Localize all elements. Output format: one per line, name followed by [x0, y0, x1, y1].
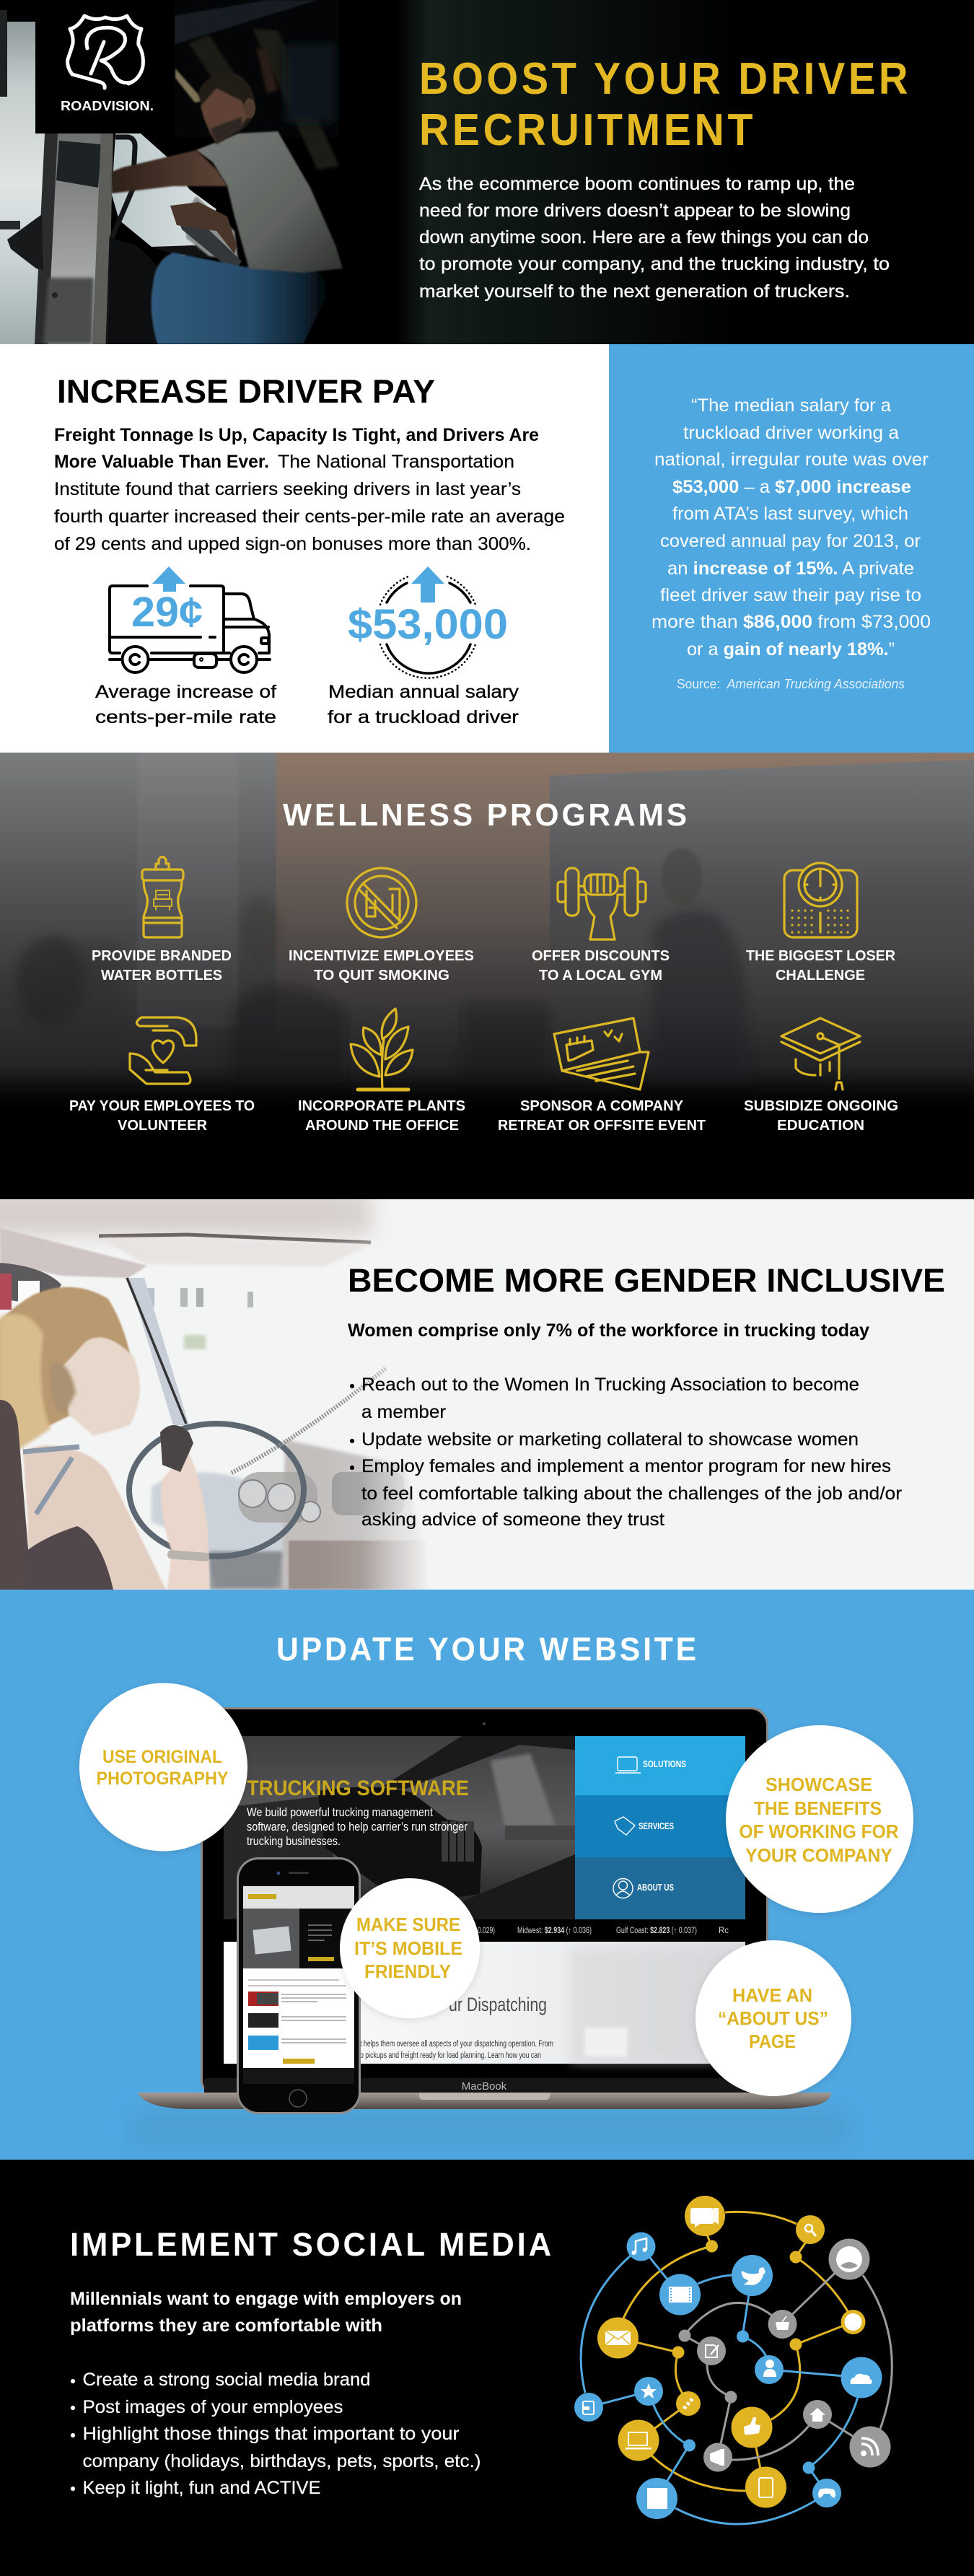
laptop screen hero	[224, 1736, 745, 1919]
laptop nav tiles: SOLUTIONS	[643, 1759, 686, 1769]
network diagram: social icons	[574, 2196, 892, 2524]
laptop price ticker: Midwest: $2.934 (↑ 0.036)	[517, 1927, 592, 1935]
callout: use original photography: PHOTOGRAPHY	[97, 1769, 229, 1789]
laptop price ticker: 0.029)	[478, 1927, 495, 1935]
icon: plant	[351, 1009, 413, 1090]
list: gender tips: asking advice of someone they trust	[361, 1510, 664, 1530]
callout: showcase benefits: THE BENEFITS	[754, 1797, 882, 1819]
text block: pay paragraph: fourth quarter increased their cents-per-mile rate an average	[54, 507, 565, 527]
list: gender tips: to feel comfortable talking about the challenges of the job and/or	[361, 1484, 902, 1504]
subheading: millennials: Millennials want to engage with employers on	[70, 2289, 462, 2309]
panel: quote: more than $86,000 from $73,000	[651, 612, 931, 632]
callout: mobile friendly	[340, 1878, 480, 2018]
callout: mobile friendly: IT’S MOBILE	[354, 1937, 462, 1959]
panel: quote: national, irregular route was over	[654, 450, 929, 470]
panel: quote: truckload driver working a	[683, 423, 899, 443]
list: gender tips: Update website or marketing collateral to showcase women	[361, 1429, 859, 1450]
label: education	[744, 1098, 898, 1134]
panel: header	[0, 0, 974, 344]
panel: wellness programs	[0, 753, 974, 1199]
subheading: women 7 percent: Women comprise only 7% of the workforce in trucking today	[348, 1320, 869, 1341]
logo	[35, 0, 175, 133]
laptop hero text: We build powerful trucking management	[247, 1805, 433, 1819]
heading: update your website: UPDATE YOUR WEBSITE	[276, 1631, 699, 1668]
label: volunteer: VOLUNTEER	[118, 1118, 208, 1134]
laptop lower section: ur Dispatching	[449, 1994, 547, 2015]
label: plants: INCORPORATE PLANTS	[298, 1098, 465, 1114]
list: gender tips: a member	[361, 1402, 446, 1422]
title: BOOST YOUR DRIVER	[419, 54, 911, 104]
text block: pay paragraph: Institute found that carriers seeking drivers in last year’s	[54, 479, 521, 499]
list: social tips	[71, 2370, 481, 2498]
stat caption: median salary: Median annual salary	[328, 682, 519, 702]
icon: delivery truck with 29 cents	[110, 566, 270, 673]
heading: implement social media: IMPLEMENT SOCIAL MEDIA	[70, 2226, 554, 2263]
heading: gender inclusive: BECOME MORE GENDER INCLUSIVE	[348, 1262, 945, 1299]
photo: woman driver in cab	[0, 1191, 505, 1590]
list: social tips: Keep it light, fun and ACTIVE	[82, 2478, 320, 2498]
laptop mockup: MacBook	[462, 2080, 507, 2093]
panel: quote: from ATA’s last survey, which	[672, 504, 908, 524]
list: gender tips	[350, 1375, 902, 1530]
panel: quote: $53,000 – a $7,000 increase	[672, 477, 911, 497]
laptop mockup	[138, 1707, 831, 2109]
icon: salary dial with 53,000: $53,000	[348, 601, 508, 648]
logo: ROADVISION.	[61, 99, 154, 113]
label: biggest loser: THE BIGGEST LOSER	[746, 948, 896, 964]
text block: intro: to promote your company, and the trucking industry, to	[419, 254, 890, 274]
label: biggest loser: CHALLENGE	[776, 968, 865, 983]
heading: wellness programs: WELLNESS PROGRAMS	[283, 797, 690, 833]
list: social tips: Highlight those things that important to your	[82, 2424, 459, 2444]
photo: office background	[16, 753, 974, 1082]
text block: intro: need for more drivers doesn’t appear to be slowing	[419, 201, 851, 221]
icon: weight scale	[784, 863, 857, 937]
text block: intro: As the ecommerce boom continues to ramp up, the	[419, 174, 855, 194]
label: incentivize employees: INCENTIVIZE EMPLOYEES	[289, 948, 474, 964]
icon: salary dial with 53,000	[348, 566, 508, 678]
stat caption: median salary	[328, 682, 519, 727]
callout: showcase benefits	[726, 1725, 913, 1913]
icon: shield with R	[68, 16, 143, 88]
icons inside nodes	[582, 2208, 878, 2509]
panel: quote: fleet driver saw their pay rise to	[660, 585, 921, 605]
text block: pay paragraph: Freight Tonnage Is Up, Capacity Is Tight, and Drivers Are	[54, 425, 539, 445]
laptop price ticker: Gulf Coast: $2.823 (↑ 0.037)	[616, 1927, 697, 1935]
laptop nav tiles: SERVICES	[639, 1821, 674, 1831]
laptop price ticker: Rc	[719, 1927, 729, 1935]
panel: quote: an increase of 15%. A private	[667, 558, 914, 579]
callout: showcase benefits: YOUR COMPANY	[745, 1844, 892, 1866]
laptop lower section: o pickups and freight ready for load planning. Learn how you can	[360, 2051, 541, 2060]
icon: no smoking	[347, 868, 416, 937]
callout: showcase benefits: OF WORKING FOR	[739, 1821, 899, 1842]
panel: quote	[609, 344, 974, 753]
laptop hero text: software, designed to help carrier’s run stronger	[247, 1820, 468, 1834]
icon: hands with heart	[130, 1017, 196, 1084]
list: gender tips: Reach out to the Women In Trucking Association to become	[361, 1375, 859, 1395]
icon: graduation cap	[781, 1018, 860, 1090]
text block: pay paragraph	[54, 425, 565, 554]
panel: increase driver pay	[0, 344, 609, 753]
stat caption: median salary: for a truckload driver	[328, 707, 519, 727]
heading: increase driver pay: INCREASE DRIVER PAY	[57, 373, 435, 410]
phone mockup	[237, 1857, 361, 2114]
panel: implement social media	[0, 2160, 974, 2576]
callout: about us page: PAGE	[749, 2030, 796, 2052]
label: provide branded water bottles: WATER BOTTLES	[101, 968, 222, 983]
icon: water bottle	[142, 857, 183, 937]
text block: intro: market yourself to the next generation of truckers.	[419, 281, 850, 302]
callout: use original photography: USE ORIGINAL	[102, 1747, 222, 1767]
laptop nav tiles: ABOUT US	[637, 1883, 674, 1893]
label: offer discounts: TO A LOCAL GYM	[539, 968, 662, 983]
callout: use original photography	[79, 1683, 247, 1852]
label: offer discounts: OFFER DISCOUNTS	[532, 948, 670, 964]
label: retreat: SPONSOR A COMPANY	[520, 1098, 684, 1114]
list: social tips: company (holidays, birthdays, pets, sports, etc.)	[82, 2451, 481, 2471]
label: offer discounts	[532, 948, 670, 983]
callout: mobile friendly: FRIENDLY	[364, 1961, 451, 1982]
icon: retreat tickets	[554, 1018, 649, 1090]
text block: intro: down anytime soon. Here are a few things you can do	[419, 227, 869, 247]
label: incentivize employees	[289, 948, 474, 983]
stat caption: cents per mile	[95, 682, 276, 727]
title: RECRUITMENT	[419, 105, 756, 155]
photo: truck driver in cab	[0, 0, 343, 344]
text block: pay paragraph: The National Transportation	[278, 452, 514, 472]
panel: quote: or a gain of nearly 18%.”	[687, 639, 895, 660]
callout: mobile friendly: MAKE SURE	[356, 1914, 460, 1935]
text block: pay paragraph: More Valuable Than Ever.	[54, 452, 269, 472]
icon: dumbbell fist	[558, 868, 646, 939]
callout: about us page	[696, 1940, 851, 2096]
panel: quote: covered annual pay for 2013, or	[660, 531, 921, 551]
label: education: EDUCATION	[777, 1118, 864, 1134]
label: retreat	[498, 1098, 706, 1134]
subheading: millennials: platforms they are comfortable with	[70, 2316, 382, 2336]
laptop lower section	[224, 1942, 745, 2064]
label: incentivize employees: TO QUIT SMOKING	[314, 968, 449, 983]
label: volunteer	[69, 1098, 255, 1134]
laptop price ticker	[224, 1919, 745, 1942]
stat caption: cents per mile: cents-per-mile rate	[95, 707, 276, 727]
text block: intro	[419, 174, 890, 302]
icon: delivery truck with 29 cents: 29¢	[131, 589, 203, 636]
laptop hero text: TRUCKING SOFTWARE	[247, 1777, 469, 1800]
label: retreat: RETREAT OR OFFSITE EVENT	[498, 1118, 706, 1134]
callout: showcase benefits: SHOWCASE	[765, 1774, 872, 1795]
label: education: SUBSIDIZE ONGOING	[744, 1098, 898, 1114]
laptop lower section: t helps them oversee all aspects of your dispatching operation. From	[360, 2040, 553, 2049]
title	[419, 54, 911, 155]
label: provide branded water bottles: PROVIDE BRANDED	[92, 948, 232, 964]
panel: gender inclusive	[0, 1191, 974, 1590]
list: gender tips: Employ females and implement a mentor program for new hires	[361, 1456, 891, 1476]
callout: about us page: “ABOUT US”	[718, 2007, 828, 2029]
label: provide branded water bottles	[92, 948, 232, 983]
subheading: millennials	[70, 2289, 462, 2336]
panel: update your website	[0, 1590, 974, 2160]
label: plants	[298, 1098, 465, 1134]
text block: pay paragraph: of 29 cents and upped sign-on bonuses more than 300%.	[54, 534, 531, 554]
callout: about us page: HAVE AN	[732, 1984, 812, 2006]
laptop hero text	[247, 1777, 469, 1848]
laptop hero text: trucking businesses.	[247, 1834, 341, 1848]
list: social tips: Create a strong social media brand	[82, 2370, 371, 2390]
source: Source: American Trucking Associations	[677, 677, 905, 691]
laptop nav tiles	[613, 1757, 686, 1898]
label: volunteer: PAY YOUR EMPLOYEES TO	[69, 1098, 255, 1114]
list: social tips: Post images of your employees	[82, 2397, 343, 2417]
panel: quote: “The median salary for a	[691, 395, 891, 416]
stat caption: cents per mile: Average increase of	[95, 682, 276, 702]
label: biggest loser	[746, 948, 896, 983]
label: plants: AROUND THE OFFICE	[305, 1118, 459, 1134]
